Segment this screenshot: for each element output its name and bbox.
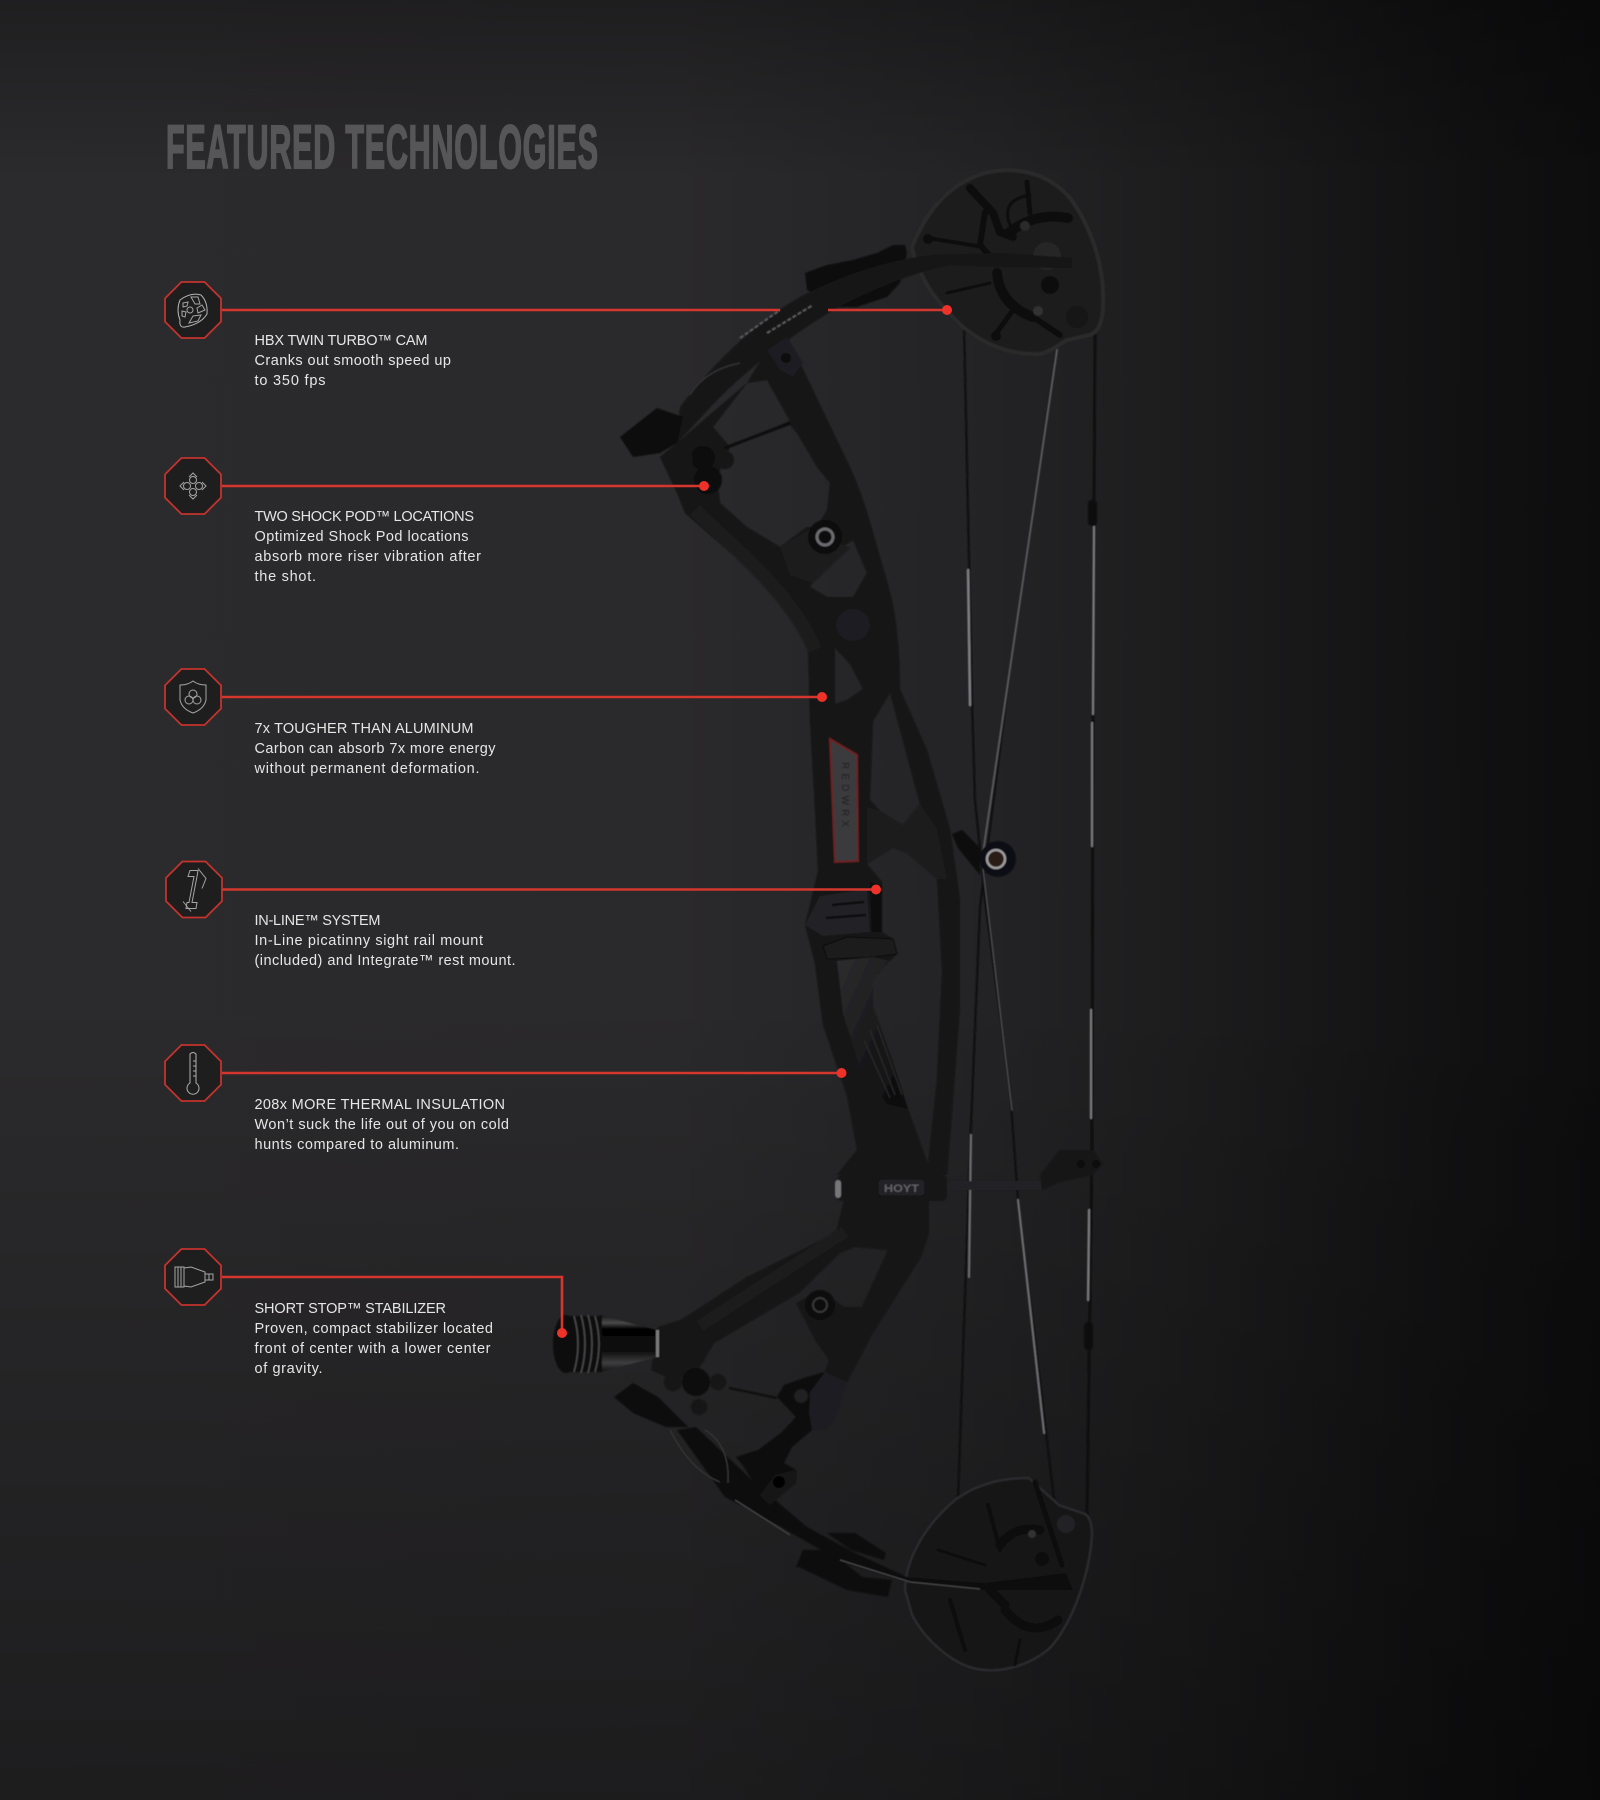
upper cam [912, 170, 1103, 354]
string peep and bracket [952, 830, 1016, 877]
limb graphic marks [740, 305, 813, 338]
text: Two Shock Pod locations: absorb more riser vibration after [254, 549, 481, 565]
upper pivot bracket [767, 337, 803, 377]
icon: in-line arrows [166, 862, 222, 918]
lower link web [809, 1372, 847, 1430]
lower limb damper block [796, 1533, 892, 1597]
grip [837, 957, 908, 1109]
HOYT plate: HOYT [884, 1183, 919, 1195]
text: In-Line system: (included) and Integrate™ rest mount. [254, 953, 516, 969]
limb bolt bar [837, 1175, 947, 1201]
icon: shield [165, 669, 221, 725]
icon: shock pods [165, 458, 221, 514]
text: HBX Twin Turbo Cam: to 350 fps [254, 373, 326, 389]
text: 208x more thermal insulation: 208x MORE THERMAL INSULATION [254, 1097, 505, 1113]
icon: cam [165, 282, 221, 338]
upper limb damper block [805, 245, 907, 307]
callout lines [222, 310, 947, 1333]
lower riser arm [651, 1200, 929, 1382]
upper shock pods [673, 423, 790, 494]
HOYT plate [878, 1179, 925, 1196]
lower shock pods [664, 1348, 726, 1415]
riser silhouette [660, 337, 960, 1175]
text: Two Shock Pod locations: the shot. [254, 569, 316, 585]
roller guard [947, 1150, 1103, 1190]
rear rib shading [695, 510, 815, 650]
grip shelf [823, 937, 897, 959]
text: Two Shock Pod locations: Optimized Shock Pod locations [254, 529, 468, 545]
silver bolt [835, 1180, 841, 1198]
upper limb pocket [620, 408, 683, 457]
short stop stabilizer [553, 1315, 659, 1373]
arrow rest block [805, 889, 870, 936]
hub web [780, 529, 850, 583]
lower link [736, 1372, 825, 1493]
REDWRX badge: REDWRX [839, 762, 850, 830]
text: 208x more thermal insulation: hunts compared to aluminum. [254, 1137, 459, 1153]
text: Short Stop stabilizer: front of center with a lower center [254, 1341, 491, 1357]
lower limb highlights [735, 1500, 980, 1589]
text: Two Shock Pod locations: TWO SHOCK POD™ LOCATIONS [254, 509, 474, 525]
upper hub [808, 520, 842, 554]
lower cam [905, 1478, 1092, 1670]
feature: Short Stop stabilizer [165, 1249, 498, 1377]
feature: In-Line system [166, 862, 516, 969]
compound bow illustration [553, 170, 1103, 1670]
riser [660, 337, 960, 1201]
text: 7x tougher than aluminum: 7x TOUGHER THAN ALUMINUM [254, 721, 474, 737]
feature: HBX Twin Turbo Cam [165, 282, 455, 389]
window oval [836, 609, 870, 641]
text: HBX Twin Turbo Cam: Cranks out smooth speed up [254, 353, 451, 369]
lower hub [805, 1290, 835, 1320]
lower thin link [729, 1388, 777, 1398]
feature: Two Shock Pod locations [165, 458, 486, 585]
icon: thermometer [165, 1045, 221, 1101]
REDWRX badge [830, 739, 858, 862]
feature: 7x tougher than aluminum [165, 669, 500, 777]
lower limb pocket [614, 1383, 688, 1427]
text: Short Stop stabilizer: of gravity. [254, 1361, 322, 1377]
text: Short Stop stabilizer: Proven, compact stabilizer located [254, 1321, 493, 1337]
lower arm shading [700, 1232, 845, 1326]
grip texture [864, 1025, 902, 1098]
text: HBX Twin Turbo Cam: HBX TWIN TURBO™ CAM [254, 333, 428, 349]
bow strings and cables [958, 277, 1097, 1567]
text: 7x tougher than aluminum: Carbon can absorb 7x more energy [254, 741, 496, 757]
lower hub web [796, 1290, 862, 1360]
text: In-Line system: In-Line picatinny sight rail mount [254, 933, 483, 949]
callout dots [557, 305, 952, 1338]
feature: 208x more thermal insulation [165, 1045, 514, 1153]
text: 208x more thermal insulation: Won’t suck the life out of you on cold [254, 1117, 509, 1133]
lower limb [677, 1427, 1073, 1590]
title: FEATURED TECHNOLOGIES [166, 114, 598, 182]
text: 7x tougher than aluminum: without permanent deformation. [254, 761, 480, 777]
text: In-Line system: IN-LINE™ SYSTEM [254, 913, 380, 929]
text: Short Stop stabilizer: SHORT STOP™ STABILIZER [254, 1301, 446, 1317]
lower limb arc decal [670, 1430, 728, 1483]
icon: stabilizer [165, 1249, 221, 1305]
bridge to front strut [867, 804, 947, 879]
limb decal [690, 363, 740, 395]
lower pivot bracket [760, 1470, 796, 1505]
upper limb [677, 253, 1072, 443]
sight rail [870, 882, 882, 932]
block slots [826, 902, 866, 918]
